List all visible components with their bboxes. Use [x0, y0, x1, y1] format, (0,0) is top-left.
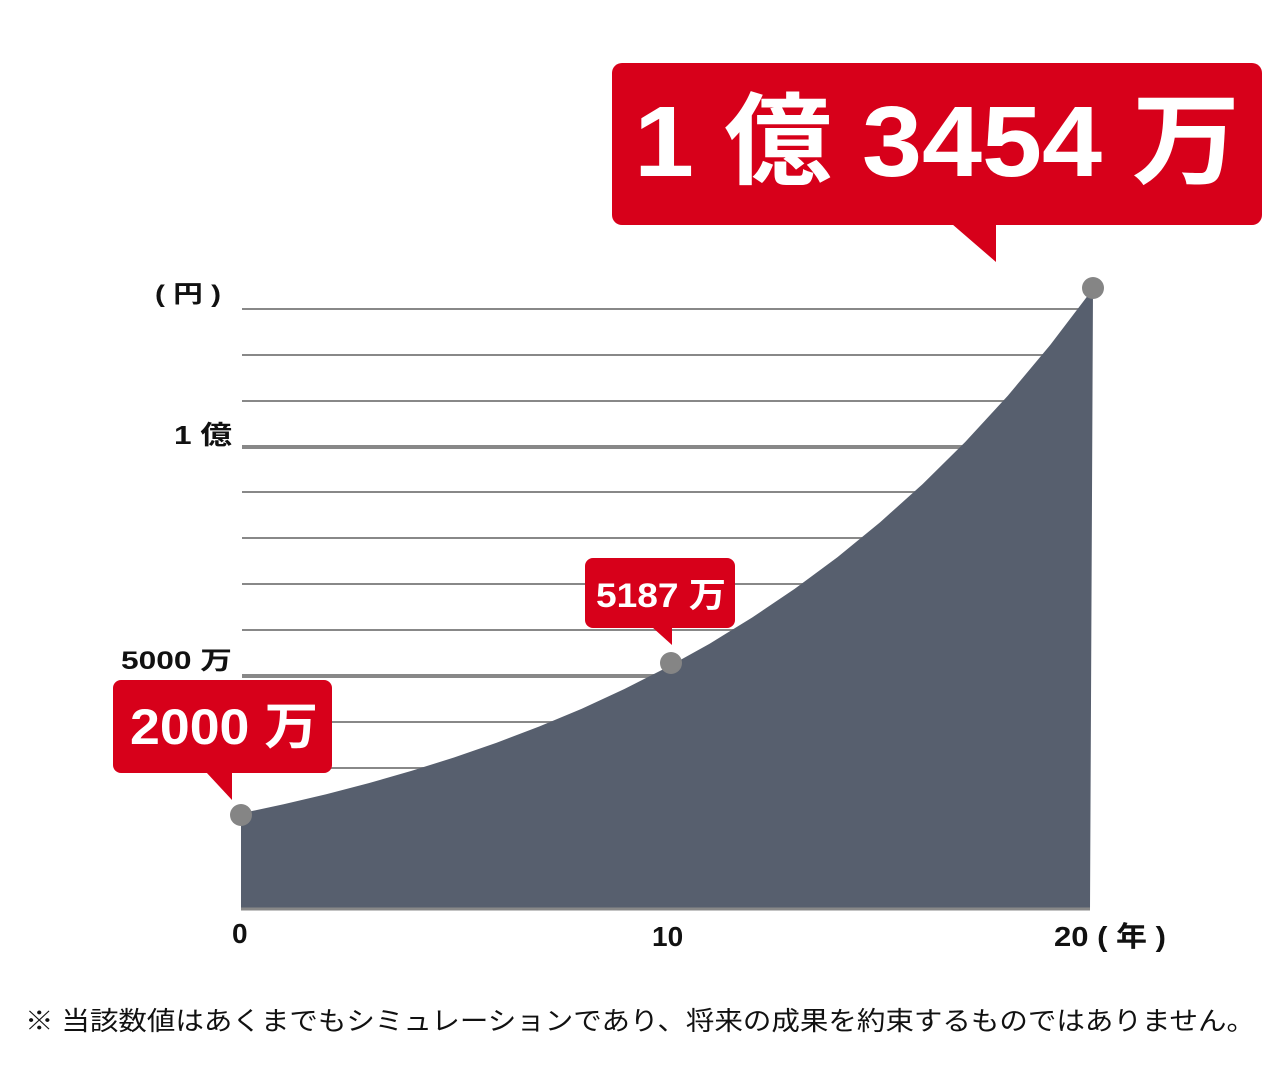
callout: 5187万: 5187 万: [596, 577, 726, 615]
callout: 2000万: [113, 680, 332, 800]
callout: 1億3454万: [612, 63, 1262, 262]
x-axis labels: [232, 918, 1166, 952]
y-axis labels: 1 億: [174, 420, 232, 450]
y-axis labels: 5000 万: [121, 647, 232, 675]
x-axis labels: 20 ( 年 ): [1054, 921, 1166, 952]
x-axis labels: 0: [232, 918, 248, 949]
callout: 5187万: [585, 558, 735, 645]
y-axis labels: [121, 281, 232, 675]
y-axis labels: ( 円 ): [155, 281, 221, 308]
data points: [230, 277, 1104, 826]
callout: 2000万: 2000 万: [130, 699, 318, 755]
callout: 1億3454万: 1 億 3454 万: [634, 86, 1240, 198]
x-axis labels: 10: [652, 921, 683, 952]
area chart: [241, 289, 1093, 910]
footnote: ※ 当該数値はあくまでもシミュレーションであり、将来の成果を約束するものではありません。: [25, 1006, 1255, 1036]
